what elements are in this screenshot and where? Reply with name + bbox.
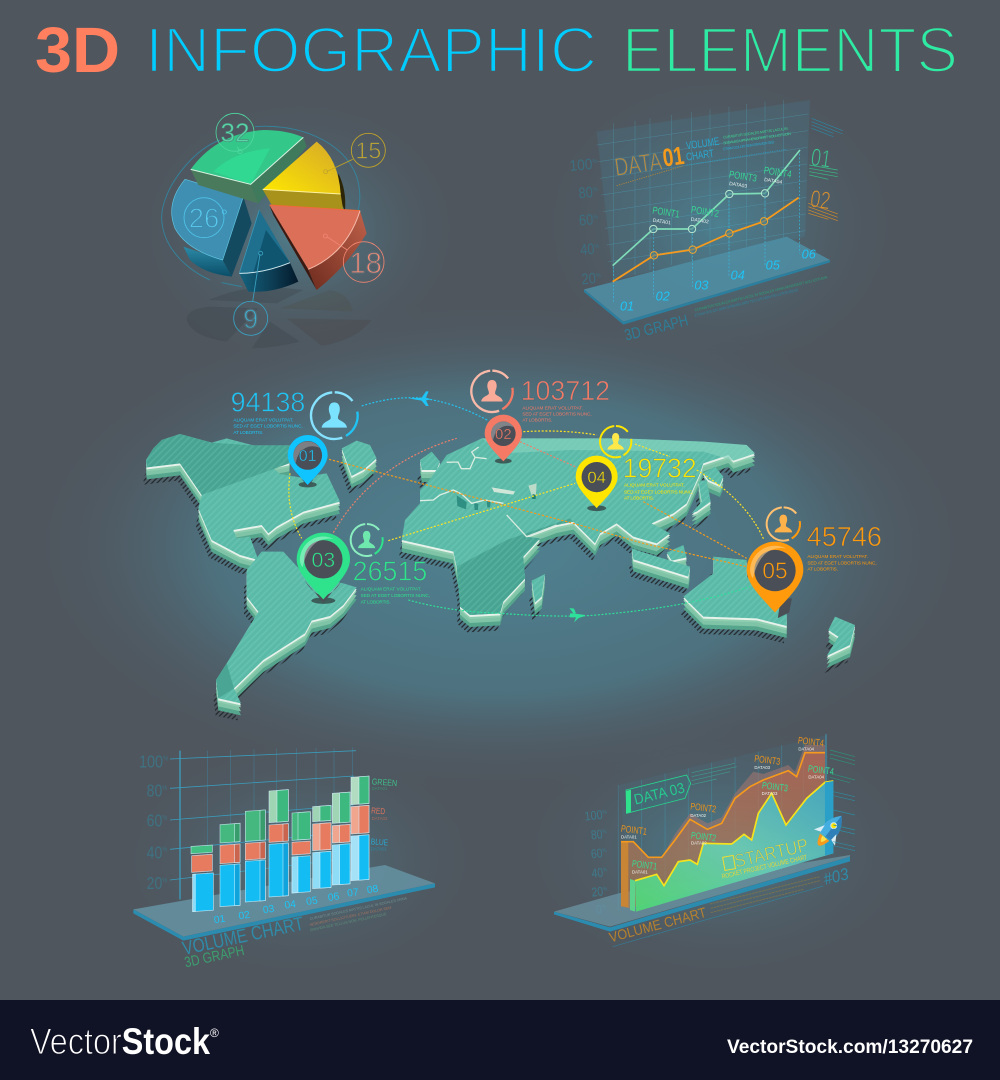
line series: white and green (613, 150, 800, 266)
header: DATA01 volume chart: ETIAM DOLOR SEM GRAVIDA SED (723, 140, 775, 151)
caption text lines (613, 877, 823, 947)
caption text lines: CURABITUR SODALES MATTIS LACUL IN SODALES URNA HENDRERIT SOLLICITUDIN (694, 275, 828, 312)
badge side text (692, 763, 737, 785)
landmass shading facets (146, 434, 755, 698)
point labels orange: POINT1 (620, 824, 647, 838)
x axis labels (620, 247, 817, 314)
panel: world map (143, 367, 882, 721)
callout: 32: 32 (221, 118, 249, 148)
title (35, 14, 958, 86)
bar 4 (269, 790, 288, 897)
bars (191, 776, 369, 912)
axis labels: 60 (590, 846, 606, 861)
back panel (597, 100, 810, 280)
slice: blue 26 (172, 179, 252, 277)
footer bar (0, 1000, 1000, 1080)
stat: 45746: SED AT EGET LOBORTIS NUNC, (807, 560, 877, 565)
base plate (584, 237, 830, 325)
x axis labels: 08 (366, 884, 379, 896)
title: 3D (35, 14, 120, 86)
bar 8 (351, 776, 369, 881)
caption text lines: ETIAM DOLOR SEM GRAVIDA SED TELLUS NON PELLENTESQUE (694, 288, 799, 318)
bar 6 (313, 805, 331, 889)
3D GRAPH caption: 3D GRAPH (623, 312, 690, 345)
x axis labels: 04 (284, 899, 297, 912)
axis labels: % (602, 810, 608, 816)
pin 03 (297, 533, 350, 604)
caption text lines (309, 896, 408, 932)
pin 03: 03 (311, 548, 335, 572)
side legend: 01 (809, 144, 833, 174)
stat: 26515: 26515 (353, 556, 427, 587)
stat: 94138: AT LOBORTIS. (233, 430, 263, 435)
point labels: DATA01 (652, 218, 671, 227)
x axis labels: 05 (306, 895, 319, 908)
x axis labels: 06 (802, 247, 817, 261)
label: STARTUP: STARTUP (732, 834, 810, 872)
axis labels: 0 (596, 902, 604, 917)
point labels orange: DATA03 (754, 765, 771, 770)
point labels orange: POINT3 (754, 754, 781, 768)
header: DATA01 volume chart: DATA (613, 148, 664, 182)
point labels orange: POINT4 (797, 735, 825, 750)
bar 2 (220, 823, 240, 907)
axis labels: % (602, 829, 608, 835)
icon: user ring yellow (598, 424, 634, 460)
point labels green: POINT3 (761, 780, 788, 794)
x axis labels (213, 884, 379, 926)
icon: blue plane (408, 391, 432, 406)
axis labels: 80 (578, 184, 596, 202)
axis labels (569, 156, 602, 288)
callout: 15: 15 (355, 138, 381, 164)
stat: 103712 (521, 375, 610, 423)
pin 01: 01 (299, 448, 317, 465)
landmass extrusion (146, 436, 855, 715)
slice: green 32 (191, 130, 307, 203)
legend: DATA03 (371, 846, 387, 851)
axis labels: % (163, 754, 169, 763)
stat: 103712: 103712 (521, 375, 610, 406)
point labels (652, 165, 793, 227)
icon: user ring green (348, 521, 385, 559)
legend (371, 776, 397, 851)
bar 7 (332, 792, 350, 885)
right side text (830, 750, 855, 851)
back grid (170, 747, 356, 899)
axis labels: % (162, 783, 168, 792)
title: INFOGRAPHIC (145, 14, 597, 86)
icon: user ring blue (307, 389, 361, 443)
point labels green: DATA02 (691, 841, 707, 846)
axis labels: % (162, 875, 168, 884)
axis labels: 20 (581, 270, 599, 288)
caption: 3D graph: 3D GRAPH (183, 943, 246, 971)
x axis labels: 06 (327, 891, 340, 904)
point labels green (631, 764, 835, 874)
orbit rings (162, 126, 360, 287)
stat: 19732: SED AT EGET LOBORTIS NUNC, (624, 489, 693, 494)
x axis labels: 05 (766, 258, 781, 272)
drop lines (613, 150, 799, 303)
point labels: POINT1 (652, 205, 681, 221)
point labels: DATA03 (729, 181, 748, 190)
line series: orange (613, 198, 799, 282)
x axis labels: 03 (262, 904, 275, 916)
slice: dark blue 9 (239, 210, 298, 292)
axis labels: 100 (584, 808, 606, 824)
stat: 94138: SED AT EGET LOBORTIS NUNC, (233, 424, 303, 429)
side legend: 02 (808, 186, 832, 215)
legend: GREEN (372, 776, 397, 788)
x axis labels: 02 (238, 910, 251, 922)
stat: 19732: AT LOBORTIS. (624, 496, 654, 501)
stat: 103712: SED AT EGET LOBORTIS NUNC, (522, 412, 592, 417)
point labels: POINT3 (728, 169, 758, 185)
callout: 18: 18 (349, 247, 382, 280)
label: STARTUP: ROCKET PROJECT VOLUME CHART (721, 854, 808, 881)
header: DATA01 volume chart: CURABITUR SODALES MATTIS LACUL IN (723, 127, 788, 140)
panel: 3D stacked bar chart (133, 747, 435, 971)
caption: volume chart: VOLUME CHART (607, 904, 708, 945)
axis labels: 40 (580, 241, 598, 259)
header: DATA01 volume chart: CHART (685, 148, 715, 164)
title: ELEMENTS (622, 14, 958, 86)
pin 02 (485, 415, 522, 464)
header: DATA01 volume chart: VOLUME (685, 136, 720, 152)
point labels orange: DATA01 (621, 834, 637, 839)
x axis labels: 04 (731, 268, 745, 282)
icon: user ring orange (764, 505, 803, 543)
x axis labels: 03 (694, 278, 708, 292)
axis labels: 60 (147, 811, 167, 831)
footer registered mark: ® (210, 1026, 219, 1040)
stat: 45746 (807, 521, 882, 572)
legend: DATA01 (372, 786, 388, 791)
axis labels: % (603, 867, 608, 874)
map shadow hatch (143, 451, 852, 721)
route: yellow dashed (289, 431, 764, 541)
header: DATA01 volume chart (613, 127, 791, 186)
callout: 9 (234, 251, 268, 335)
stat: 94138: ALIQUAM ERAT VOLUTPAT. (233, 417, 293, 422)
back panel (618, 735, 833, 910)
stat: 26515: ALIQUAM ERAT VOLUTPAT. (361, 587, 421, 592)
point labels: DATA04 (764, 177, 783, 186)
route: red dashed (333, 438, 577, 533)
point labels green: DATA01 (632, 869, 648, 874)
x axis labels: 02 (656, 290, 670, 304)
axis labels: % (602, 848, 608, 854)
point labels: POINT4 (763, 165, 793, 181)
bar 1 (191, 845, 213, 912)
data markers (650, 190, 769, 259)
caption: volume chart: VOLUME CHART (181, 914, 306, 960)
point labels orange: DATA04 (798, 747, 815, 752)
callout: 26 (184, 198, 226, 238)
panel: 3D pie chart (162, 113, 385, 348)
point labels: POINT2 (690, 205, 720, 220)
axis labels: % (592, 186, 598, 194)
stat: 26515: AT LOBORTIS. (361, 599, 391, 604)
stat: 26515 (353, 556, 430, 604)
header: DATA01 volume chart: 01 (661, 142, 686, 173)
pin 04 (576, 456, 618, 511)
stat: 45746: ALIQUAM ERAT VOLUTPAT. (807, 554, 868, 559)
side legend (808, 118, 843, 221)
caption text lines: CURABITUR SODALES MATTIS LACUL IN SODALES URNA (309, 896, 408, 921)
route: blue dashed (362, 398, 488, 421)
area series: green (630, 781, 833, 912)
point labels orange (620, 735, 825, 839)
stat: 19732 (623, 452, 697, 501)
axis labels: 80 (590, 827, 606, 842)
axis labels: 100 (139, 751, 169, 771)
callout: 18 (323, 234, 384, 282)
pin 02: 02 (495, 426, 512, 443)
panel: 3D area chart (554, 734, 855, 947)
bar 5 (292, 812, 310, 893)
area series: orange (621, 745, 825, 908)
pin 05: 05 (762, 557, 788, 583)
stat: 45746: AT LOBORTIS. (807, 567, 838, 572)
legend: DATA02 (372, 816, 388, 821)
x axis labels: 01 (213, 914, 226, 926)
route: green dashed (408, 587, 750, 616)
stat: 94138 (231, 387, 305, 435)
footer logo: VectorStock (30, 1021, 210, 1062)
footer url: VectorStock.com/13270627 (727, 1037, 973, 1058)
axis labels: 20 (147, 873, 167, 893)
axis labels: % (593, 214, 598, 221)
axis labels: 80 (147, 781, 167, 801)
axis labels (139, 751, 169, 893)
axis labels: % (601, 904, 607, 911)
grid lines (618, 734, 826, 910)
x axis labels: 01 (620, 300, 634, 314)
stat: 26515: SED AT EGET LOBORTIS NUNC, (361, 593, 430, 598)
stat: 103712: ALIQUAM ERAT VOLUTPAT. (522, 405, 583, 410)
label: STARTUP (721, 834, 810, 881)
slice: yellow 15 (263, 142, 345, 211)
icon: green plane (569, 608, 585, 622)
pin 04: 04 (587, 468, 606, 487)
axis labels: 40 (591, 865, 606, 881)
icon: user ring red (468, 367, 516, 415)
axis labels: 100 (569, 156, 596, 175)
point labels orange: DATA02 (690, 813, 707, 818)
point labels green: POINT1 (631, 859, 658, 873)
callout: 32 (216, 113, 254, 154)
legend: BLUE (371, 836, 389, 848)
callout: 15 (324, 133, 385, 174)
pin 01 (288, 435, 328, 487)
x axis labels: 07 (347, 887, 360, 900)
callout: 9: 9 (243, 304, 258, 334)
inland seas (420, 447, 557, 537)
point labels: DATA02 (690, 217, 709, 226)
axis labels: % (162, 813, 168, 822)
axis labels: % (594, 243, 600, 250)
panel: 3D line graph (569, 100, 843, 345)
pie floor shadow (187, 287, 372, 348)
route: orange dashed (329, 459, 747, 567)
axis labels: 20 (591, 884, 606, 900)
caption text lines: HENDRERIT SOLLICITUDIN. ETIAM DOLOR SEM (309, 906, 392, 927)
base plate (554, 855, 850, 932)
point labels green: POINT2 (690, 830, 717, 844)
axis labels: % (603, 886, 608, 893)
axis labels: 60 (578, 211, 597, 230)
axis labels: % (592, 158, 598, 166)
slice: red 18 (269, 205, 367, 290)
stat: 19732: 19732 (623, 452, 697, 483)
stat: 19732: ALIQUAM ERAT VOLUTPAT. (624, 483, 685, 488)
stat: 103712: AT LOBORTIS. (522, 418, 552, 423)
landmass top surfaces (146, 434, 855, 703)
caption: #03: #03 (821, 864, 851, 889)
bar 3 (245, 810, 265, 902)
caption text lines: GRAVIDA SED TELLUS NON. PELLENTESQUE (309, 912, 387, 932)
icon: rocket (808, 808, 852, 853)
legend: RED (371, 805, 386, 816)
stat: 45746: 45746 (807, 521, 882, 552)
point labels orange: POINT2 (690, 801, 717, 815)
badge: DATA 03 (626, 775, 691, 813)
point labels green: POINT4 (807, 764, 835, 778)
axis labels: % (595, 272, 601, 280)
header: DATA01 volume chart: SODALES LIPNA HENDRERIT SOLLICITUDIN (723, 132, 791, 145)
badge: DATA 03: DATA 03 (632, 781, 686, 809)
axis labels: % (162, 845, 168, 854)
point labels green: DATA04 (808, 774, 825, 779)
base plate (133, 865, 435, 941)
axis labels: 40 (147, 842, 167, 862)
axis labels (584, 807, 609, 917)
point labels green: DATA03 (762, 791, 778, 796)
grid lines (597, 100, 808, 277)
callout: 26: 26 (189, 203, 219, 234)
pin 05 (747, 542, 803, 618)
stat: 94138: 94138 (231, 387, 305, 418)
